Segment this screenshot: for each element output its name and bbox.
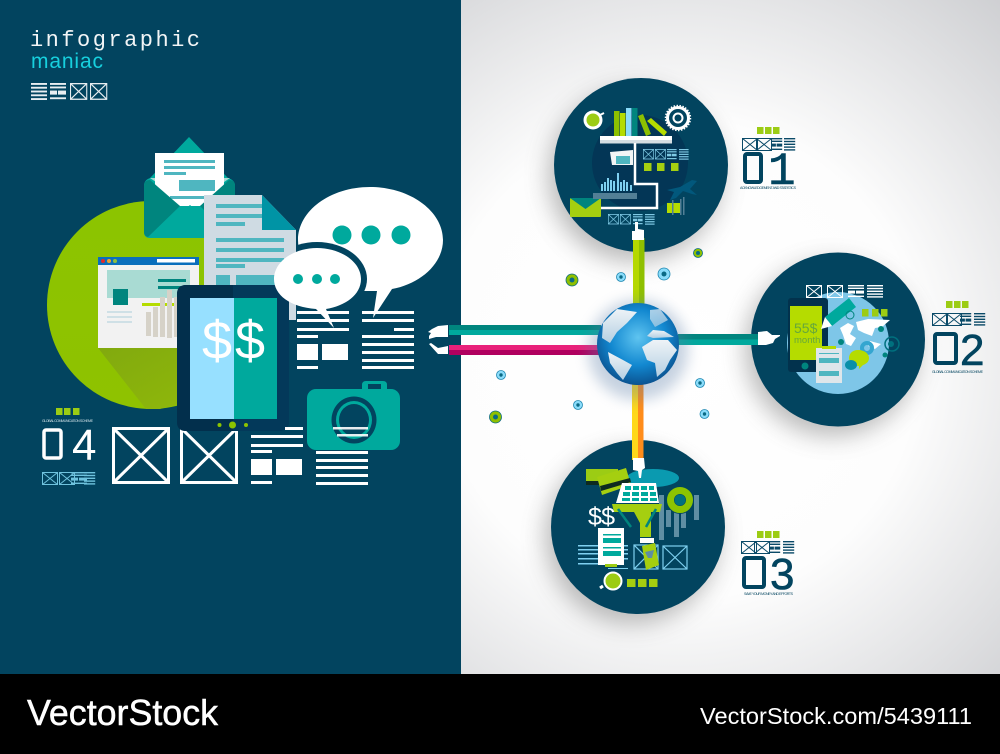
small chart [667,197,684,215]
top icons [806,285,883,298]
title [30,28,200,73]
circle 1 [548,78,728,262]
funnel [612,504,662,537]
small icons [643,149,689,160]
shelf [600,136,672,144]
icon: hand top left [428,325,448,339]
teal ellipse [627,469,679,487]
connector: magenta bar left [449,345,601,355]
clipboard [816,346,842,383]
image boxes [634,545,687,569]
rings and dots [838,311,899,358]
label 04 [42,408,96,485]
placeholder image boxes [114,428,236,482]
connector: orange vertical [632,380,644,460]
bubbles [845,350,869,370]
grey bars [659,495,699,540]
network dots [490,248,709,423]
bar chart [601,173,632,191]
label 03: 3 [770,550,794,599]
text placeholder under camera [316,451,368,485]
icon: hand right [758,331,780,345]
label 04: 4 [72,421,96,470]
dollars: $$ [588,503,615,531]
green squares [644,163,678,171]
icon: tablet [177,285,289,431]
document page [204,195,296,320]
strip [593,193,637,199]
magnifier [600,572,622,590]
icon: plane [667,180,697,200]
ring [666,486,694,514]
pencil [821,298,856,329]
green squares [627,579,658,587]
connector: teal right [678,334,760,345]
circle 2 [745,252,925,436]
label 01: 1 [768,146,796,198]
label 02 [932,301,985,375]
browser window [98,257,199,348]
doc [598,528,624,567]
label 01: ACKNOWLEDGEMENT AND STATISTICS [740,186,797,190]
connector: teal bar left [449,325,601,335]
label 02: GLOBAL COMMUNICATION SCHEME [932,370,984,374]
bottom small icons [608,214,655,225]
label 01 [740,127,797,198]
icon: envelope [570,198,601,217]
phone [788,298,828,372]
footer bar [0,674,1000,754]
phone: month [794,335,820,346]
footer url: VectorStock.com/5439111 [700,703,972,729]
header small icons [31,83,107,100]
icon: hand bottom left [429,343,448,354]
small doc [610,150,633,165]
globe disc [787,292,889,394]
label 02: 2 [960,326,984,375]
circle 3 [545,440,725,624]
text lines [578,545,628,569]
footer logo: VectorStock [27,692,219,733]
icon: tablet: $ [235,311,265,371]
text placeholder right [362,311,414,369]
icon: books [614,108,667,136]
phone: 55$ [794,320,818,336]
connector: green vertical [633,238,644,308]
solar panel [616,483,659,503]
title: maniac [31,50,103,73]
right background panel [461,0,1000,674]
label 03 [742,531,794,599]
title: infographic [30,28,200,53]
world map [840,319,890,349]
green squares [862,309,888,316]
icon: tablet: $ [202,311,232,371]
tilted phone [640,538,659,570]
icon: hand pointing up [632,222,644,240]
globe [588,300,688,400]
connector line [600,143,657,208]
text placeholder under tablet [251,427,303,484]
cards [586,468,631,495]
label 03: SAVE YOUR MONEY AND EFFORTS [744,592,794,596]
icon: hand pointing down [633,458,645,478]
icon: cup [584,110,604,130]
icon: camera [307,381,400,450]
text placeholder left [297,311,349,369]
label 04: GLOBAL COMMUNICATION SCHEME [42,419,94,423]
icon: small speech bubble [267,242,367,328]
icon: gear [666,106,690,130]
icon: envelope [144,137,235,238]
green circle with long shadow [47,201,255,409]
continents [602,309,677,380]
left dark panel [0,0,461,674]
icon: big speech bubble [298,187,443,318]
